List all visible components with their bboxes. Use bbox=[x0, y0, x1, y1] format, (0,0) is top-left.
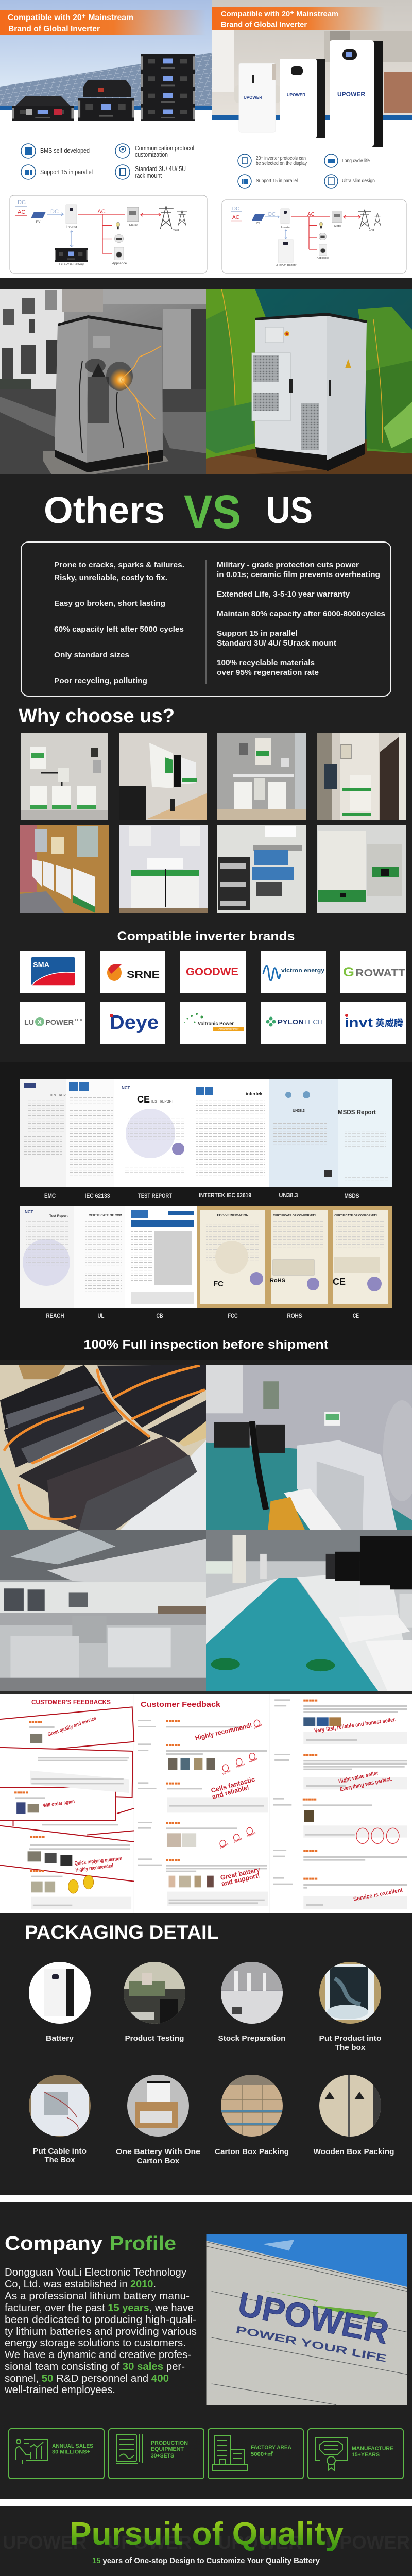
install photo 1 bbox=[21, 733, 108, 820]
doc: UN38.3: UN38.3 bbox=[293, 1109, 305, 1113]
wiring diagram: rack: PV bbox=[36, 220, 41, 224]
right palm bbox=[358, 307, 412, 453]
doc: MSDS bbox=[338, 1079, 392, 1187]
features: rack bbox=[21, 144, 194, 179]
others column: Only standard sizes bbox=[54, 651, 129, 659]
stat: manufacture years: 15+YEARS bbox=[352, 2452, 380, 2458]
banner: compatible bbox=[212, 7, 385, 30]
stat: factory area: 5000+㎡ bbox=[251, 2451, 273, 2458]
features: rack: Communication protocol bbox=[135, 145, 194, 152]
features: wall: Long cycle life bbox=[342, 158, 370, 164]
white building bbox=[0, 289, 206, 389]
certificate row 2 bbox=[20, 1206, 392, 1308]
rack batteries bbox=[12, 54, 195, 121]
doc: UL bbox=[74, 1206, 125, 1308]
stat: production equipment: PRODUCTION bbox=[151, 2440, 188, 2446]
wiring diagram: wall: DC bbox=[232, 206, 239, 212]
company description: ty lithium batteries and providing various bbox=[5, 2326, 197, 2337]
subtitle: 15 years of One-stop Design to Customize Your Quality Battery bbox=[92, 2556, 320, 2565]
step photo: battery bbox=[29, 1962, 91, 2024]
doc: UL: CERTIFICATE OF COM bbox=[89, 1214, 122, 1217]
logo: GOODWE: GOODWE bbox=[186, 966, 238, 978]
logo: PylonTech: PYLON bbox=[278, 1018, 304, 1026]
photo: test room bbox=[206, 1365, 412, 1530]
banner: compatible: Compatible with 20⁺ Mainstream bbox=[8, 13, 133, 22]
perfect stamps text: Perfect bbox=[236, 1762, 246, 1769]
heading: compatible inverter brands: Compatible inverter brands bbox=[117, 929, 295, 943]
company description: well-trained employees. bbox=[4, 2384, 115, 2396]
doc: test report: TEST REPORT bbox=[150, 1100, 174, 1104]
photo: warehouse bbox=[0, 1530, 206, 1691]
install photo 4 bbox=[317, 733, 406, 820]
wall batteries: UPOWER bbox=[244, 95, 262, 100]
us column: over 95% regeneration rate bbox=[217, 669, 319, 677]
logo: PylonTech: TECH bbox=[304, 1018, 323, 1026]
photo: production line bbox=[206, 1530, 412, 1691]
doc: test report: CE bbox=[137, 1094, 150, 1105]
wiring diagram: rack: DC bbox=[18, 199, 26, 206]
step labels row 1 bbox=[46, 2034, 381, 2052]
wiring diagram: wall: Inverter bbox=[281, 226, 290, 229]
us column: Extended Life, 3-5-10 year warranty bbox=[217, 590, 350, 599]
wiring diagram: rack: AC bbox=[97, 209, 106, 215]
certificate labels row 2: FCC bbox=[228, 1313, 238, 1319]
wiring diagram: wall: LiFePO4 Battery bbox=[276, 264, 297, 267]
company description: energy storage solutions to customers. bbox=[5, 2337, 186, 2349]
photo: building sign: UPOWER bbox=[235, 2284, 392, 2351]
feedback annotations: Quick replying question bbox=[74, 1856, 123, 1867]
step labels row 2 bbox=[33, 2147, 394, 2165]
perfect stamps text: Perfect bbox=[222, 1769, 232, 1776]
features: rack: BMS self-developed bbox=[40, 147, 90, 155]
step photo: testing bbox=[124, 1962, 185, 2024]
wiring diagram: rack: Grid bbox=[173, 229, 179, 232]
doc: RoHS: CERTIFICATE OF CONFORMITY bbox=[273, 1214, 316, 1217]
panel: factory photos bbox=[0, 1365, 412, 1691]
company description: facturer, over the past 15 years, we have bbox=[5, 2302, 194, 2314]
perfect stamps text: Perfect bbox=[219, 1843, 229, 1850]
panel: rack battery product bbox=[0, 0, 212, 278]
perfect stamps text: Perfect bbox=[249, 1757, 259, 1764]
wiring diagram: wall: AC bbox=[307, 212, 315, 217]
step photo: wooden box bbox=[319, 2075, 384, 2137]
stat: manufacture years bbox=[308, 2429, 403, 2479]
wiring diagram: wall bbox=[222, 200, 406, 273]
banner: compatible: Brand of Global Inverter bbox=[221, 21, 307, 29]
step photo: product in box bbox=[319, 1962, 381, 2024]
doc: EMC bbox=[20, 1079, 73, 1187]
doc: EMC: TEST REPORT bbox=[49, 1094, 73, 1097]
wiring diagram: rack: DC bbox=[50, 209, 59, 215]
features: wall: Ultra slim design bbox=[342, 178, 375, 184]
others column: Risky, unreliable, costly to fix. bbox=[54, 574, 167, 582]
certificate labels row 1: TEST REPORT bbox=[138, 1193, 172, 1199]
features: rack: rack mount bbox=[135, 172, 162, 179]
features: wall bbox=[238, 154, 375, 188]
feedback hand stamps bbox=[220, 1720, 399, 1847]
doc: FCC: FCC-VERIFICATION bbox=[217, 1214, 249, 1217]
banner: compatible: Brand of Global Inverter bbox=[8, 25, 100, 33]
stat: manufacture years: MANUFACTURE bbox=[352, 2446, 393, 2452]
photo: building sign bbox=[207, 2234, 407, 2405]
certificate labels row 1: UN38.3 bbox=[279, 1193, 298, 1199]
doc: CE: CERTIFICATE OF CONFORMITY bbox=[334, 1214, 377, 1217]
step labels row 2: Carton Box bbox=[137, 2157, 180, 2165]
panel: comparison bbox=[21, 542, 391, 696]
wiring diagram: rack: AC bbox=[18, 209, 25, 215]
doc: test report bbox=[114, 1079, 193, 1187]
logo: LuxPower: LU bbox=[24, 1018, 34, 1026]
doc: REACH bbox=[20, 1206, 74, 1308]
stat: production equipment: EQUIPMENT bbox=[151, 2446, 184, 2452]
logo: GROWATT: ROWATT bbox=[355, 968, 405, 979]
perfect stamps text bbox=[219, 1723, 263, 1850]
install photo 6 bbox=[119, 825, 208, 913]
doc: FCC bbox=[197, 1206, 268, 1308]
logo: GOODWE bbox=[180, 951, 246, 993]
feedback annotations: Service is excellent bbox=[353, 1887, 403, 1903]
cabinet bbox=[55, 315, 163, 472]
feedback annotations: Cells fantastic bbox=[210, 1775, 256, 1794]
left palm bbox=[206, 289, 270, 459]
us column: Support 15 in parallel bbox=[217, 630, 298, 638]
logo: SRNE: SRNE bbox=[127, 970, 160, 980]
wall batteries bbox=[239, 40, 383, 147]
logo: victron energy bbox=[261, 951, 326, 993]
features: wall: 20⁺ inverter protocols can bbox=[256, 156, 306, 161]
feedback annotations: Great battery bbox=[220, 1866, 261, 1882]
stat: production equipment: 30+SETS bbox=[151, 2453, 174, 2459]
company description: Co, Ltd. was established in 2010. bbox=[5, 2279, 156, 2290]
doc: FCC: FC bbox=[213, 1280, 224, 1289]
logo: INVT: invt bbox=[345, 1015, 373, 1030]
watermark row: UPOWER bbox=[3, 2532, 87, 2553]
feedback headings bbox=[31, 1698, 221, 1709]
others column bbox=[54, 561, 184, 685]
photo: building sign: POWER YOUR LIFE bbox=[235, 2324, 388, 2365]
step labels row 1: The box bbox=[335, 2043, 366, 2052]
step photo: carton bbox=[127, 2075, 189, 2137]
banner: compatible bbox=[0, 10, 206, 35]
logo: Voltronic Power bbox=[180, 1002, 246, 1044]
heading: why choose us: Why choose us? bbox=[19, 705, 175, 727]
feedback annotations: Everything was perfect. bbox=[339, 1776, 392, 1793]
logo: Voltronic Power: Advancing Power bbox=[219, 1028, 239, 1031]
company description bbox=[4, 2267, 197, 2396]
logo: LuxPower: POWER bbox=[45, 1018, 74, 1026]
doc: test report: NCT bbox=[122, 1086, 130, 1090]
doc: RoHS: RoHS bbox=[270, 1278, 285, 1284]
certificate labels row 1: MSDS bbox=[344, 1193, 359, 1199]
wall batteries: UPOWER bbox=[287, 93, 305, 97]
us column: Military - grade protection cuts power bbox=[217, 561, 359, 569]
certificate labels row 2: ROHS bbox=[287, 1313, 302, 1319]
features: wall: Support 15 in parallel bbox=[256, 178, 298, 184]
doc: MSDS: MSDS Report bbox=[338, 1108, 376, 1116]
solar array bbox=[0, 53, 212, 106]
feedback annotations bbox=[43, 1716, 403, 1903]
perfect stamps text: Perfect bbox=[233, 1837, 243, 1844]
doc: CB bbox=[125, 1206, 197, 1308]
photo: upower cabinet in leaves bbox=[206, 289, 412, 474]
step labels row 2: Wooden Box Packing bbox=[313, 2147, 394, 2156]
us column: Standard 3U/ 4U/ 5Urack mount bbox=[217, 639, 336, 648]
doc: REACH: Test Report bbox=[49, 1214, 68, 1218]
certificate labels row 2: REACH bbox=[46, 1313, 64, 1319]
panel: wall battery product bbox=[212, 0, 412, 278]
logo: SRNE bbox=[100, 951, 165, 993]
install photo 5 bbox=[20, 825, 109, 913]
feedback drawn layout bbox=[0, 1694, 407, 1913]
doc: IEC 62133 bbox=[66, 1079, 114, 1187]
us column: 100% recyclable materials bbox=[217, 659, 315, 667]
pallet bbox=[43, 451, 169, 474]
feedback annotations: and support! bbox=[220, 1871, 261, 1888]
feedback annotations: Highly recommend! bbox=[194, 1721, 253, 1742]
feedback headings: CUSTOMER'S FEEDBACKS bbox=[31, 1698, 111, 1706]
company description: We have a dynamic and creative profes- bbox=[5, 2349, 191, 2361]
us column: Maintain 80% capacity after 6000-8000cycles bbox=[217, 610, 385, 618]
install photo 2 bbox=[119, 733, 207, 820]
heading: company profile: Company bbox=[5, 2233, 102, 2255]
step labels row 1: Put Product into bbox=[319, 2034, 381, 2043]
feedback annotations: Very fast, reliable and honest seller. bbox=[314, 1717, 397, 1734]
title: others vs us: VS bbox=[184, 486, 241, 538]
step photo: carton stack bbox=[221, 2075, 283, 2137]
doc: CE: CE bbox=[333, 1277, 346, 1287]
photo: damaged competitor cabinet bbox=[0, 289, 206, 474]
logo: Deye bbox=[100, 1002, 165, 1044]
wiring diagram: wall: Meter bbox=[334, 225, 341, 228]
logo: INVT: 英威腾 bbox=[375, 1018, 403, 1028]
wiring diagram: rack: Inverter bbox=[66, 225, 78, 229]
watermark row: UPOWER bbox=[326, 2532, 410, 2553]
feedback headings: Customer Feedback bbox=[141, 1700, 221, 1709]
watermark row bbox=[3, 2532, 410, 2553]
step photo: stock bbox=[221, 1962, 283, 2024]
heading: pursuit of quality: Pursuit of Quality bbox=[70, 2516, 344, 2552]
wiring diagram: rack: Meter bbox=[129, 224, 138, 227]
others column: 60% capacity left after 5000 cycles bbox=[54, 625, 184, 634]
logo: SMA: SMA bbox=[33, 961, 50, 969]
others column: Easy go broken, short lasting bbox=[54, 600, 165, 608]
features: rack: Standard 3U/ 4U/ 5U bbox=[135, 165, 186, 173]
others column: Prone to cracks, sparks & failures. bbox=[54, 561, 184, 569]
logo: Deye: Deye bbox=[110, 1012, 159, 1033]
step labels row 2: Put Cable into bbox=[33, 2147, 87, 2156]
step labels row 2: The Box bbox=[44, 2156, 75, 2164]
us column: in 0.01s; ceramic film prevents overheating bbox=[217, 571, 380, 579]
logo: PylonTech bbox=[261, 1002, 326, 1044]
doc: REACH: NCT bbox=[25, 1210, 33, 1214]
stat: factory area: FACTORY AREA bbox=[251, 2445, 291, 2451]
wiring diagram: wall: Grid bbox=[369, 229, 374, 232]
logo: LuxPower: X bbox=[38, 1018, 42, 1026]
step labels row 1: Product Testing bbox=[125, 2034, 184, 2043]
features: rack: Support 15 in parallel bbox=[40, 168, 93, 176]
lightning bbox=[110, 346, 161, 470]
title: others vs us: US bbox=[266, 490, 313, 531]
certificate labels row 1 bbox=[44, 1193, 359, 1199]
feedback annotations: and reliable! bbox=[211, 1783, 250, 1801]
certificate labels row 1: IEC 62133 bbox=[84, 1193, 110, 1199]
wiring diagram: rack: Appliance bbox=[112, 262, 127, 265]
heading: company profile: Profile bbox=[110, 2233, 176, 2255]
company description: been dedicated to producing high-quali- bbox=[5, 2314, 196, 2326]
company description: As a professional lithium battery manu- bbox=[5, 2291, 190, 2302]
install photo 3 bbox=[217, 733, 306, 820]
certificate row 1 bbox=[20, 1079, 392, 1187]
watermark row: UPOWER bbox=[108, 2532, 192, 2553]
wiring diagram: wall: Appliance bbox=[317, 257, 329, 260]
wiring diagram: wall: DC bbox=[268, 212, 276, 217]
doc: Intertek bbox=[193, 1079, 269, 1187]
features: rack: customization bbox=[135, 151, 168, 158]
us column bbox=[217, 561, 385, 677]
perfect stamps text: Perfect bbox=[247, 1832, 256, 1838]
heading: packaging detail: PACKAGING DETAIL bbox=[25, 1922, 219, 1943]
install photo 7 bbox=[217, 825, 306, 913]
certificate labels row 2: CB bbox=[157, 1313, 163, 1319]
wiring diagram: wall: PV bbox=[256, 222, 260, 225]
cabinet bbox=[252, 313, 367, 471]
features: wall: be selected on the display bbox=[256, 161, 307, 166]
certificate labels row 1: INTERTEK IEC 62619 bbox=[199, 1193, 251, 1199]
perfect stamps text: Perfect bbox=[253, 1723, 263, 1730]
certificate labels row 2: CE bbox=[353, 1313, 359, 1319]
doc: Intertek: intertek bbox=[246, 1091, 263, 1096]
step labels row 2: Carton Box Packing bbox=[215, 2147, 289, 2156]
company description: Dongguan YouLi Electronic Technology bbox=[5, 2267, 186, 2278]
feedback annotations: Will order again bbox=[43, 1799, 75, 1809]
company description: sonnel, 50 R&D personnel and 400 bbox=[5, 2373, 169, 2384]
watermark row: UPOWER bbox=[218, 2532, 302, 2553]
panel: packaging steps bbox=[29, 1962, 394, 2165]
logo: INVT bbox=[340, 1002, 406, 1044]
step photo: cable in box bbox=[29, 2075, 91, 2137]
logo: Voltronic Power: Voltronic Power bbox=[198, 1021, 234, 1027]
stat: annual sales bbox=[9, 2429, 104, 2479]
heading: full inspection: 100% Full inspection before shipment bbox=[83, 1337, 329, 1352]
wall batteries: UPOWER bbox=[337, 91, 365, 98]
doc: UN38.3 bbox=[269, 1079, 338, 1187]
stat: production equipment bbox=[109, 2429, 204, 2479]
wiring diagram: rack bbox=[10, 195, 207, 273]
logo: LuxPower bbox=[20, 1002, 85, 1044]
stat: annual sales: ANNUAL SALES bbox=[52, 2443, 93, 2449]
install photo 8 bbox=[317, 825, 406, 913]
doc: CE bbox=[331, 1206, 392, 1308]
logo: LuxPower: TEK bbox=[74, 1019, 83, 1022]
logo: GROWATT: G bbox=[343, 965, 354, 979]
installation photos bbox=[20, 733, 406, 913]
wiring diagram: rack: LiFePO4 Battery bbox=[59, 263, 84, 266]
doc: RoHS bbox=[268, 1206, 331, 1308]
title: others vs us bbox=[44, 486, 313, 538]
heading: company profile bbox=[5, 2233, 176, 2255]
panel: certificates bbox=[0, 1062, 412, 1360]
logo: GROWATT bbox=[340, 951, 406, 993]
feedback annotations: Great quality and service bbox=[47, 1716, 97, 1738]
step labels row 1: Stock Preparation bbox=[218, 2034, 285, 2043]
certificate labels row 2: UL bbox=[98, 1313, 104, 1319]
stat: annual sales: 30 MILLIONS+ bbox=[52, 2449, 90, 2455]
feedback annotations: Highly recomended bbox=[75, 1863, 114, 1873]
photo: battery modules bbox=[0, 1365, 206, 1530]
logo: SMA bbox=[20, 951, 85, 993]
banner: compatible: Compatible with 20⁺ Mainstream bbox=[221, 10, 338, 19]
feedback annotations: Hight value seller bbox=[338, 1770, 380, 1785]
certificate labels row 1: EMC bbox=[44, 1193, 56, 1199]
step labels row 2: One Battery With One bbox=[116, 2147, 200, 2156]
panel: customer feedback bbox=[0, 1691, 412, 1913]
certificate labels row 2 bbox=[46, 1313, 359, 1319]
stat: factory area bbox=[208, 2429, 303, 2479]
company description: sional team consisting of 30 sales per- bbox=[5, 2361, 185, 2372]
inverter brand logos bbox=[20, 951, 406, 1044]
logo: victron energy: victron energy bbox=[281, 968, 325, 974]
step labels row 1: Battery bbox=[46, 2034, 74, 2043]
panel: company stats bbox=[9, 2429, 403, 2479]
title: others vs us: Others bbox=[44, 490, 165, 531]
wiring diagram: wall: AC bbox=[232, 215, 239, 221]
others column: Poor recycling, polluting bbox=[54, 677, 147, 685]
